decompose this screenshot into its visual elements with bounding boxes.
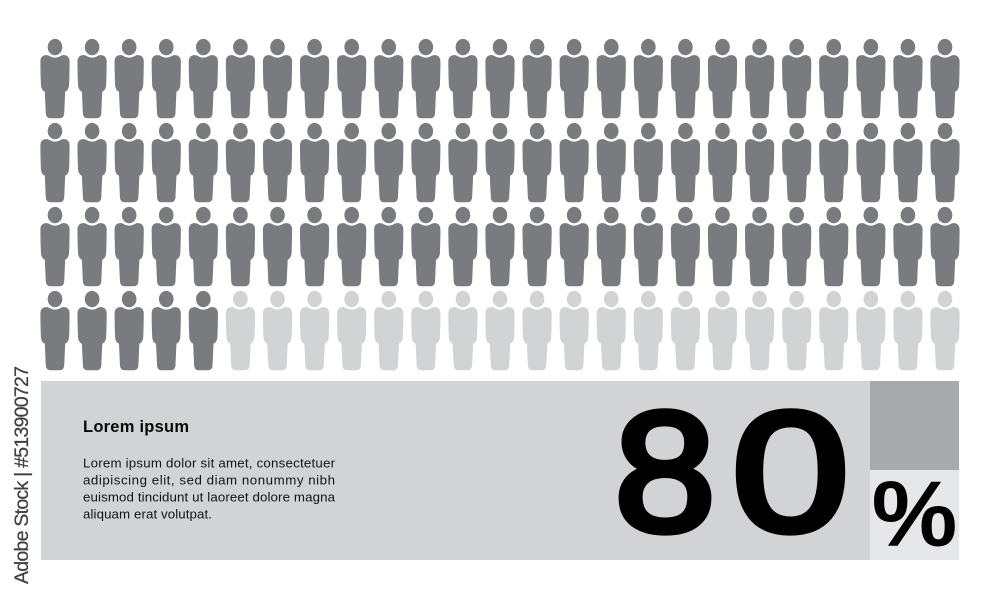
panel: caption band bbox=[41, 381, 870, 560]
big number: 80: 8 bbox=[614, 378, 716, 567]
panel: dark square bbox=[870, 381, 959, 470]
text block: description: euismod tincidunt ut laoreet dolore magna bbox=[83, 490, 336, 504]
big number: 80 bbox=[614, 377, 849, 567]
row 4: 5 dark people bbox=[40, 291, 218, 370]
row 3: 25 dark people bbox=[40, 207, 960, 286]
row 4: 20 light people bbox=[226, 291, 960, 370]
heading: Lorem ipsum: Lorem ipsum bbox=[83, 418, 189, 436]
percent sign: % bbox=[872, 463, 957, 567]
pictogram: people chart, 80 of 100 highlighted bbox=[40, 39, 960, 370]
row 2: 25 dark people bbox=[40, 123, 960, 202]
big number: 80: 0 bbox=[732, 377, 849, 567]
vertical stock credit: Adobe Stock | #513900727 bbox=[11, 366, 33, 584]
text block: description: Lorem ipsum dolor sit amet, consectetuer bbox=[83, 456, 336, 470]
text block: description: adipiscing elit, sed diam nonummy nibh bbox=[83, 472, 335, 488]
text block: description: aliquam erat volutpat. bbox=[83, 506, 212, 522]
row 1: 25 dark people bbox=[40, 39, 960, 118]
panel: light square bbox=[870, 470, 959, 560]
text block: description bbox=[83, 456, 336, 522]
